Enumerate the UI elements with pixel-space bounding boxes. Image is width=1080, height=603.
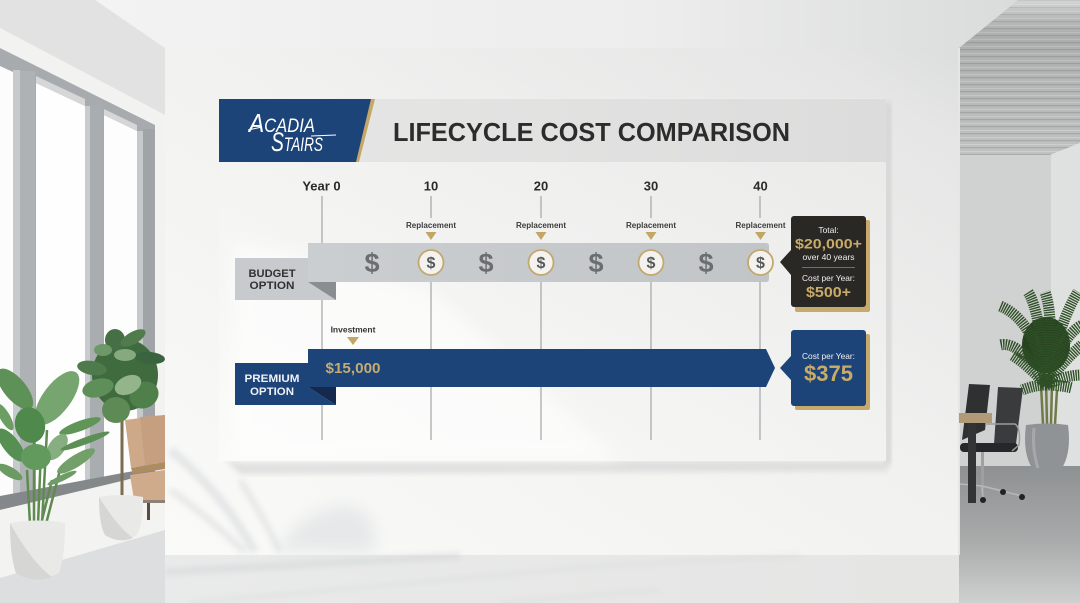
premium cost callout: $375 <box>804 361 853 386</box>
plant: broad leaf in white pot <box>0 363 111 580</box>
budget total callout: over 40 years <box>802 252 854 262</box>
header band <box>219 99 886 162</box>
timeline axis <box>302 178 768 440</box>
armchair <box>125 415 165 520</box>
timeline axis: 10 <box>424 178 438 194</box>
logo panel: STAIRS <box>271 127 323 157</box>
budget total callout: $500+ <box>806 284 851 301</box>
budget total callout: $20,000+ <box>795 236 862 252</box>
budget total callout: Total: <box>818 225 839 235</box>
budget option label: BUDGET <box>248 268 296 280</box>
premium option label: OPTION <box>250 386 294 398</box>
budget option label <box>235 258 336 300</box>
budget option bar <box>308 243 773 282</box>
replacement markers: Replacement <box>516 221 566 230</box>
premium option label: PREMIUM <box>244 373 300 385</box>
logo panel: ACADIA <box>247 108 315 138</box>
office chairs and table <box>959 384 1025 503</box>
logo panel <box>219 99 375 162</box>
premium cost callout: Cost per Year: <box>802 351 855 361</box>
budget option bar: $ <box>537 255 546 272</box>
budget total callout <box>780 216 870 312</box>
replacement markers: Replacement <box>626 221 676 230</box>
replacement markers <box>406 221 786 240</box>
wall board <box>219 98 891 474</box>
window wall <box>0 0 165 603</box>
premium option label <box>235 363 336 405</box>
budget option bar: $ <box>647 255 656 272</box>
replacement markers: Replacement <box>736 221 786 230</box>
replacement markers: Replacement <box>406 221 456 230</box>
premium option bar: $15,000 <box>326 361 380 377</box>
budget total callout: Cost per Year: <box>802 273 855 283</box>
timeline axis: 40 <box>753 178 768 194</box>
plain dollar signs: $ <box>588 248 604 278</box>
plain dollar signs: $ <box>478 248 494 278</box>
budget option bar: $ <box>756 255 765 272</box>
coins <box>418 250 773 275</box>
plant: fiddle leaf in white pot <box>76 326 165 540</box>
plant: palm in grey pot <box>1000 292 1080 473</box>
right side room <box>958 0 1080 603</box>
budget option bar: $ <box>427 255 436 272</box>
timeline axis: Year 0 <box>302 178 341 194</box>
plain dollar signs: $ <box>364 248 380 278</box>
plain dollar signs: $ <box>698 248 714 278</box>
premium option bar <box>308 349 775 387</box>
budget option label: OPTION <box>250 280 295 292</box>
investment marker: Investment <box>331 324 376 334</box>
title: LIFECYCLE COST COMPARISON <box>393 117 790 147</box>
timeline axis: 30 <box>644 178 658 194</box>
investment marker <box>331 324 376 345</box>
premium cost callout <box>780 330 870 410</box>
timeline axis: 20 <box>534 178 548 194</box>
plain dollar signs <box>364 248 714 278</box>
